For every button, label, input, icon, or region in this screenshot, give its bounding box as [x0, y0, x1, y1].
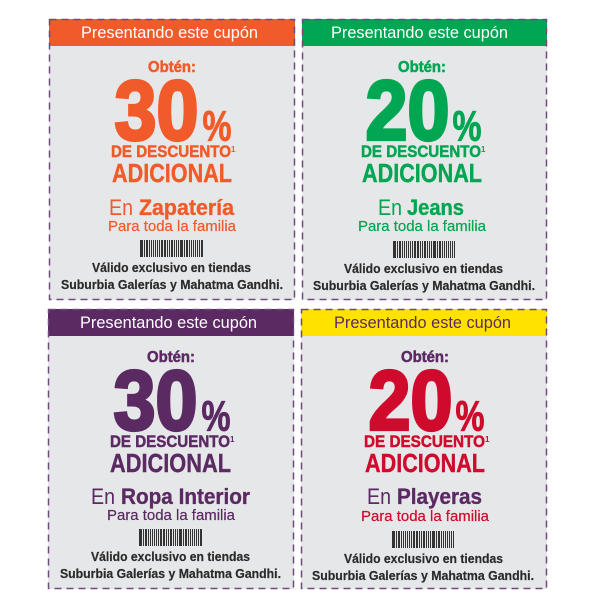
- department prefix: En: [367, 484, 391, 509]
- barcode: [392, 531, 454, 548]
- validity line 1: Válido exclusivo en tiendas: [344, 552, 503, 566]
- validity line 2: Suburbia Galerías y Mahatma Gandhi.: [313, 279, 535, 293]
- adicional: ADICIONAL: [365, 448, 485, 478]
- percent sign: %: [202, 102, 232, 150]
- header text: Presentando este cupón: [331, 23, 508, 42]
- barcode: [393, 241, 455, 258]
- discount number: 30: [114, 354, 198, 448]
- adicional: ADICIONAL: [110, 448, 231, 478]
- coupon: 30% ropa interior: [48, 309, 294, 589]
- header text: Presentando este cupón: [81, 23, 258, 42]
- department prefix: En: [109, 195, 133, 220]
- obtén label: Obtén:: [401, 349, 449, 366]
- department prefix: En: [378, 195, 402, 220]
- department prefix: En: [91, 484, 115, 509]
- coupon: 20% playeras: [301, 309, 547, 589]
- family line: Para toda la familia: [361, 508, 490, 525]
- validity line 1: Válido exclusivo en tiendas: [91, 550, 250, 564]
- de descuento: DE DESCUENTO: [364, 432, 485, 451]
- family line: Para toda la familia: [107, 507, 236, 524]
- barcode: [139, 529, 202, 546]
- header text: Presentando este cupón: [334, 313, 511, 332]
- footnote mark: 1: [485, 435, 490, 444]
- validity line 1: Válido exclusivo en tiendas: [344, 262, 503, 276]
- header band: [48, 309, 294, 336]
- discount number: 20: [368, 354, 452, 448]
- family line: Para toda la familia: [358, 218, 487, 235]
- validity line 2: Suburbia Galerías y Mahatma Gandhi.: [312, 569, 534, 583]
- header band: [302, 19, 547, 46]
- validity line 2: Suburbia Galerías y Mahatma Gandhi.: [60, 567, 281, 581]
- footnote mark: 1: [481, 145, 486, 154]
- percent sign: %: [452, 102, 482, 150]
- de descuento: DE DESCUENTO: [361, 142, 481, 161]
- barcode: [140, 240, 203, 257]
- validity line 1: Válido exclusivo en tiendas: [92, 261, 251, 275]
- department name: Zapatería: [139, 195, 235, 220]
- adicional: ADICIONAL: [112, 158, 232, 188]
- discount number: 20: [366, 64, 450, 158]
- footnote mark: 1: [230, 435, 235, 444]
- obtén label: Obtén:: [398, 59, 446, 76]
- department name: Playeras: [397, 484, 482, 509]
- de descuento: DE DESCUENTO: [111, 142, 231, 161]
- department name: Ropa Interior: [121, 484, 250, 509]
- coupon: 30% zapatería: [49, 19, 295, 300]
- percent sign: %: [456, 392, 484, 440]
- header text: Presentando este cupón: [80, 313, 257, 332]
- header band: [49, 19, 295, 46]
- header band: [301, 309, 547, 336]
- de descuento: DE DESCUENTO: [110, 432, 230, 451]
- obtén label: Obtén:: [147, 349, 195, 366]
- percent sign: %: [202, 392, 230, 440]
- department name: Jeans: [407, 195, 464, 220]
- obtén label: Obtén:: [148, 59, 196, 76]
- coupon: 20% jeans: [302, 19, 547, 300]
- validity line 2: Suburbia Galerías y Mahatma Gandhi.: [61, 278, 283, 292]
- family line: Para toda la familia: [108, 218, 237, 235]
- footnote mark: 1: [231, 145, 236, 154]
- adicional: ADICIONAL: [362, 158, 482, 188]
- discount number: 30: [114, 64, 198, 158]
